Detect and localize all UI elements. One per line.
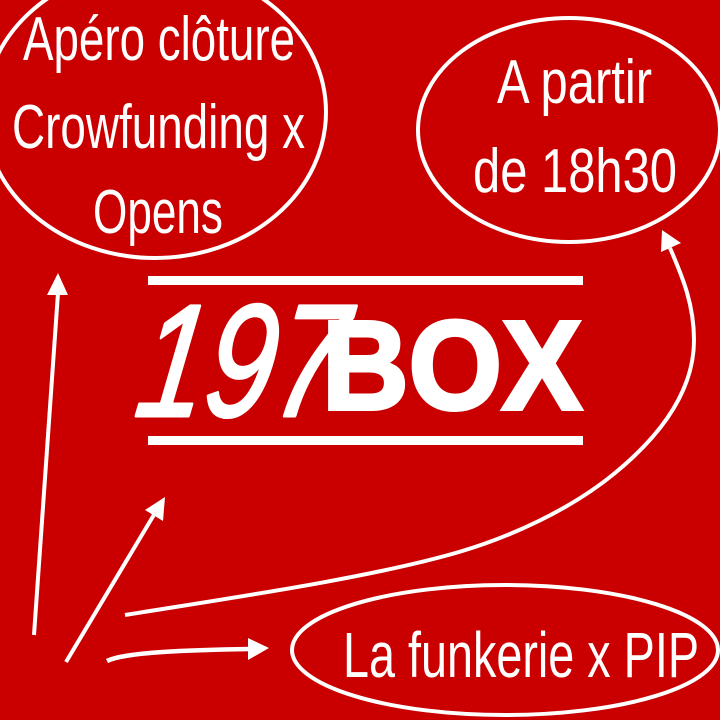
logo: 197 BOX: 197 xyxy=(128,272,362,451)
arrow: to performers xyxy=(107,638,269,661)
callout: event title: Apéro clôture xyxy=(23,5,295,74)
callout: start time: A partir xyxy=(497,48,652,117)
arrow: to event title xyxy=(34,273,68,635)
callout: event title: Opens xyxy=(93,178,223,247)
callout: event title xyxy=(0,0,326,258)
logo: 197 BOX xyxy=(128,272,583,451)
callout: event title: Crowfunding x xyxy=(12,93,305,162)
logo: 197 BOX: BOX xyxy=(322,295,582,436)
arrow: to start time xyxy=(125,230,694,615)
callout: performers xyxy=(292,585,718,715)
callout: start time xyxy=(418,18,720,242)
arrow: to logo xyxy=(66,497,165,662)
